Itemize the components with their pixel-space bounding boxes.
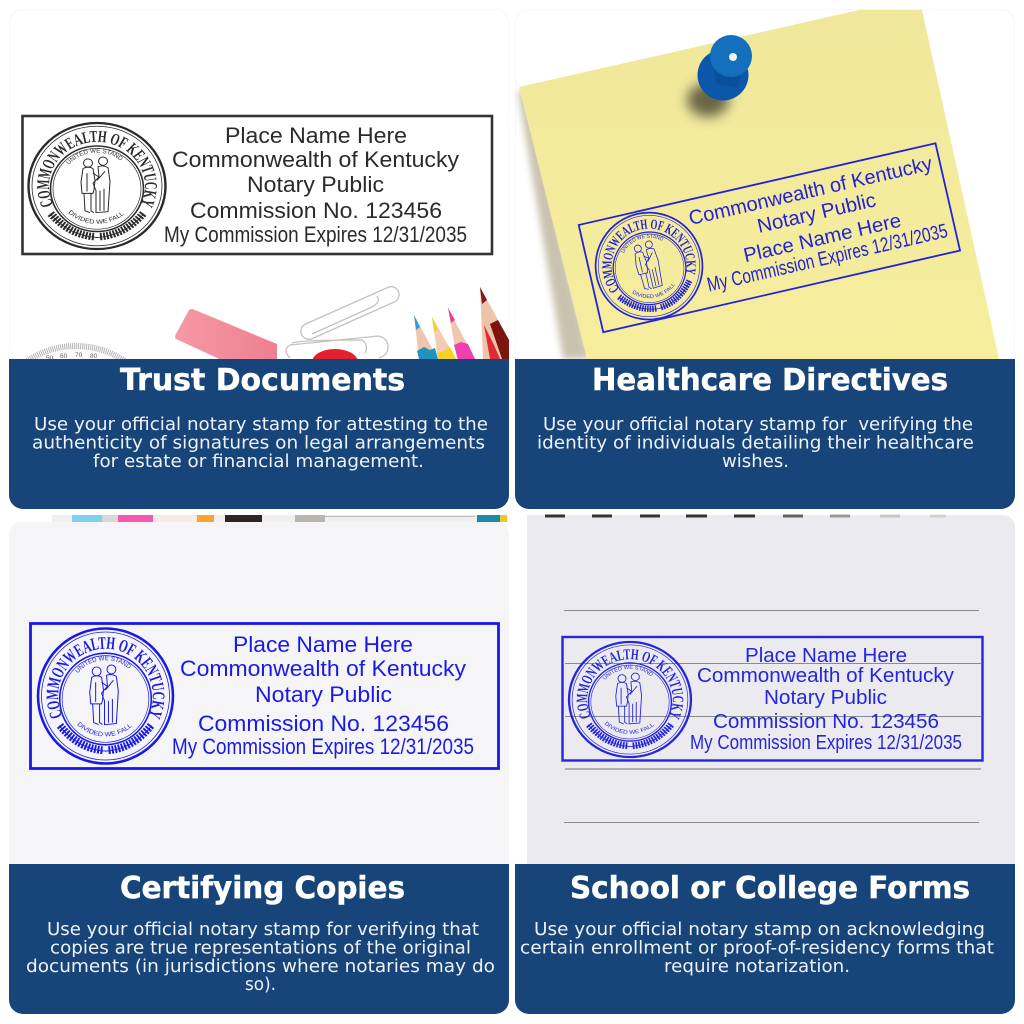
stamp text: Commission No. 123456 bbox=[713, 711, 939, 733]
stamp text: Commission No. 123456 bbox=[190, 198, 442, 223]
spiral binding marks bbox=[545, 514, 946, 518]
stamp text: Commission No. 123456 bbox=[198, 711, 449, 736]
seal: DIVIDED WE FALL bbox=[604, 721, 654, 734]
panel: certifying copies bbox=[9, 515, 509, 1014]
protractor: 50 bbox=[46, 355, 54, 362]
protractor bbox=[26, 343, 127, 359]
stamp text: Commonwealth of Kentucky bbox=[180, 656, 466, 681]
stamp text: My Commission Expires 12/31/2035 bbox=[705, 220, 950, 296]
seal bbox=[568, 640, 692, 758]
stamp text: Notary Public bbox=[755, 189, 878, 238]
stamp border bbox=[22, 116, 492, 254]
push pin bbox=[687, 35, 752, 117]
body text bbox=[537, 415, 974, 472]
seal: DIVIDED WE FALL bbox=[77, 722, 132, 736]
stamp text: Notary Public bbox=[247, 172, 384, 197]
stamp text: My Commission Expires 12/31/2035 bbox=[172, 734, 474, 759]
caption panel bbox=[9, 864, 509, 1014]
paper clips bbox=[286, 284, 402, 358]
black stamp impression bbox=[21, 114, 494, 256]
protractor: 70 bbox=[75, 352, 83, 359]
body text: Use your official notary stamp on acknowledging bbox=[534, 920, 985, 940]
body text bbox=[32, 415, 488, 472]
stamp text: Commonwealth of Kentucky bbox=[687, 153, 934, 230]
stamp text: Place Name Here bbox=[741, 210, 903, 267]
blue stamp impression bbox=[561, 636, 984, 762]
stamp text: Commonwealth of Kentucky bbox=[697, 665, 954, 687]
seal: DIVIDED WE FALL bbox=[68, 210, 124, 224]
body text: Use your official notary stamp for verifying that bbox=[47, 920, 479, 940]
desk supplies bbox=[26, 286, 509, 359]
body text: documents (in jurisdictions where notaries may do bbox=[26, 957, 495, 977]
stamp border bbox=[562, 637, 982, 760]
body text: Use your official notary stamp for attesting to the bbox=[34, 415, 488, 435]
red pencil bbox=[480, 287, 509, 359]
seal: UNITED WE STAND bbox=[621, 234, 664, 253]
seal: COMMONWEALTH OF KENTUCKY bbox=[602, 219, 696, 293]
stamp text bbox=[164, 123, 467, 247]
stamp text bbox=[172, 632, 474, 759]
body text bbox=[520, 920, 994, 977]
red tape roll bbox=[312, 349, 358, 375]
pin base bbox=[698, 50, 748, 100]
stamp text: Place Name Here bbox=[745, 645, 907, 667]
pin highlight bbox=[729, 53, 737, 61]
seal: UNITED WE STAND bbox=[602, 665, 653, 680]
stamp text: My Commission Expires 12/31/2035 bbox=[690, 732, 962, 754]
seal: DIVIDED WE FALL bbox=[632, 284, 675, 298]
stamp border bbox=[30, 624, 498, 768]
panel: trust documents bbox=[9, 114, 509, 509]
seal bbox=[27, 122, 167, 250]
panel: healthcare directives bbox=[514, 10, 1015, 509]
sticky note bbox=[519, 10, 999, 359]
seal: UNITED WE STAND bbox=[66, 148, 122, 164]
body text: certain enrollment or proof-of-residency forms that bbox=[520, 938, 994, 958]
body text: so). bbox=[245, 975, 276, 995]
seal: COMMONWEALTH OF KENTUCKY bbox=[576, 649, 684, 720]
stamp text: My Commission Expires 12/31/2035 bbox=[164, 222, 467, 247]
seal: UNITED WE STAND bbox=[75, 656, 131, 672]
body text: identity of individuals detailing their healthcare bbox=[537, 434, 974, 454]
pin head bbox=[710, 35, 752, 77]
stamp text: Notary Public bbox=[255, 682, 392, 707]
heading: Healthcare Directives bbox=[592, 363, 948, 398]
body text: copies are true representations of the original bbox=[50, 938, 471, 958]
caption panel bbox=[9, 359, 509, 509]
seal bbox=[594, 212, 704, 320]
body text: require notarization. bbox=[664, 957, 850, 977]
seal: COMMONWEALTH OF KENTUCKY bbox=[37, 130, 157, 208]
stamp text: Place Name Here bbox=[225, 123, 407, 148]
seal: COMMONWEALTH OF KENTUCKY bbox=[46, 637, 164, 720]
photo background bbox=[516, 10, 1014, 370]
sticky note shadow bbox=[518, 90, 590, 359]
pink pencil bbox=[448, 308, 475, 359]
stamp text bbox=[687, 153, 950, 297]
paper background bbox=[9, 522, 509, 870]
photo background bbox=[10, 10, 508, 370]
stamp text: Notary Public bbox=[764, 687, 887, 709]
heading: Trust Documents bbox=[120, 363, 405, 398]
body text: authenticity of signatures on legal arrangements bbox=[32, 434, 485, 454]
pin shadow bbox=[687, 83, 729, 117]
stamp border bbox=[579, 143, 960, 332]
notebook page bbox=[527, 515, 1015, 870]
body text: wishes. bbox=[722, 452, 789, 472]
body text: Use your official notary stamp for verifying the bbox=[543, 415, 973, 435]
caption panel bbox=[515, 359, 1015, 509]
blue pencil bbox=[414, 315, 438, 359]
caption panel bbox=[515, 864, 1015, 1014]
eraser bbox=[175, 309, 277, 362]
stamp text: Place Name Here bbox=[233, 632, 413, 657]
ruled lines bbox=[564, 610, 981, 822]
heading: Certifying Copies bbox=[120, 871, 405, 906]
stamp text: Commonwealth of Kentucky bbox=[172, 147, 459, 172]
colored pencils bbox=[414, 287, 509, 359]
protractor: 80 bbox=[90, 353, 98, 360]
protractor: 60 bbox=[60, 353, 68, 360]
body text: for estate or financial management. bbox=[93, 452, 424, 472]
colored tabs behind paper bbox=[52, 515, 507, 522]
seal bbox=[36, 627, 174, 765]
heading: School or College Forms bbox=[570, 871, 970, 906]
body text bbox=[26, 920, 495, 995]
panel: school or college forms bbox=[515, 514, 1015, 1014]
yellow pencil bbox=[432, 317, 456, 359]
pin neck bbox=[712, 62, 742, 88]
blue stamp impression, rotated bbox=[578, 142, 962, 334]
blue stamp impression bbox=[29, 622, 500, 770]
stamp text bbox=[690, 645, 962, 754]
